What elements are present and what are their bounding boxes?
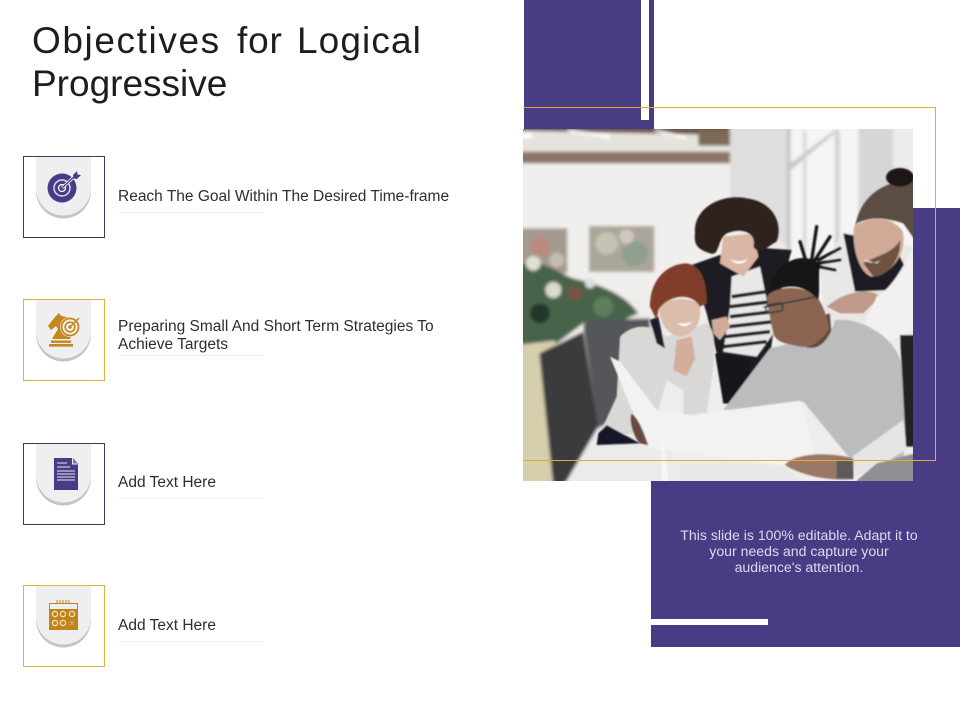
curly woman [692,247,792,407]
text: Reach The Goal Within The Desired Time-frame [118,188,449,205]
text: Preparing Small And Short Term Strategies To Achieve Targets [118,318,434,353]
title: Logical [297,20,422,61]
objective row 4 [23,585,264,667]
panel: right purple block [651,208,960,647]
panel: top purple block [524,0,654,129]
objective row 1 [23,156,449,238]
text: editable note: audience's attention. [735,559,863,575]
text: Add Text Here [118,474,216,491]
title [32,20,422,104]
photo: team reviewing a document [523,129,913,481]
title: for [237,20,283,61]
icon box: calendar [23,585,105,667]
icon box: chess knight and target [23,299,105,381]
text: editable note [680,527,918,575]
gold outline frame [523,107,936,461]
white accent bar [651,619,768,625]
icon box: document [23,443,105,525]
man bun [820,232,915,343]
text: Add Text Here [118,617,216,634]
icon box: target [23,156,105,238]
text: editable note: your needs and capture your [709,543,889,559]
objective row 2 [23,299,434,381]
white accent bar [641,0,649,120]
objective row 3 [23,443,264,525]
dreadlocks man [800,313,833,353]
document [610,357,815,465]
red-haired woman [598,323,714,437]
text: editable note: This slide is 100% editable. Adapt it to [680,527,918,543]
title: Objectives [32,20,221,61]
title: Progressive [32,63,227,104]
